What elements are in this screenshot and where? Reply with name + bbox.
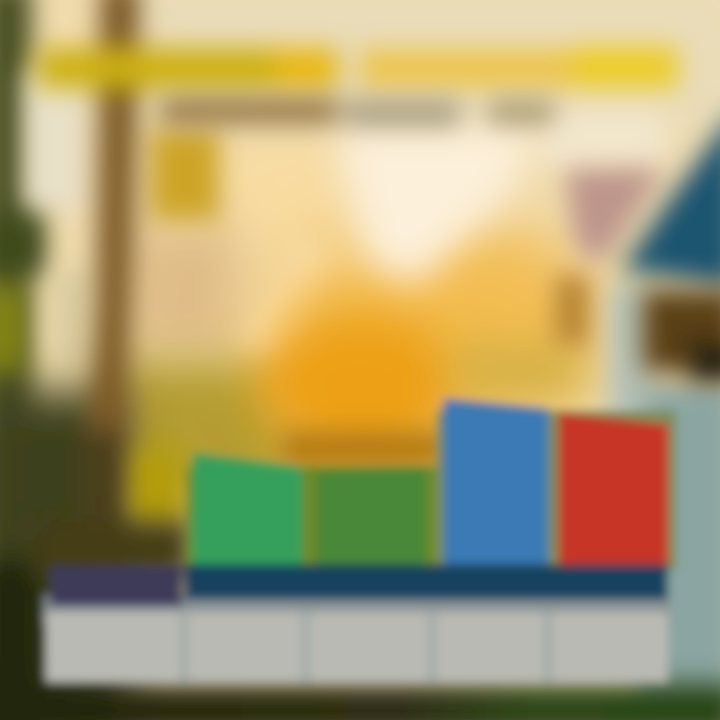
bar: blue xyxy=(443,398,548,572)
sun glow xyxy=(260,125,595,470)
bar: red xyxy=(558,412,668,572)
foliage left xyxy=(0,0,32,720)
house: dark window xyxy=(642,290,720,372)
bar chart xyxy=(186,398,676,572)
house: pink gable xyxy=(565,168,665,265)
house: wall xyxy=(608,285,650,425)
table header: first column xyxy=(50,566,182,606)
backing between bars xyxy=(186,466,446,570)
subtitle band xyxy=(160,98,554,126)
title banner xyxy=(38,46,678,88)
house xyxy=(565,105,720,705)
table header: data columns xyxy=(184,564,668,600)
bar: green xyxy=(192,452,302,572)
table body row xyxy=(46,612,668,682)
table xyxy=(44,564,670,682)
bar: dark green xyxy=(316,466,426,572)
tree trunk xyxy=(80,0,140,570)
house: blue roof xyxy=(620,105,720,288)
ground and table surround xyxy=(0,520,720,720)
table backing xyxy=(44,595,670,625)
